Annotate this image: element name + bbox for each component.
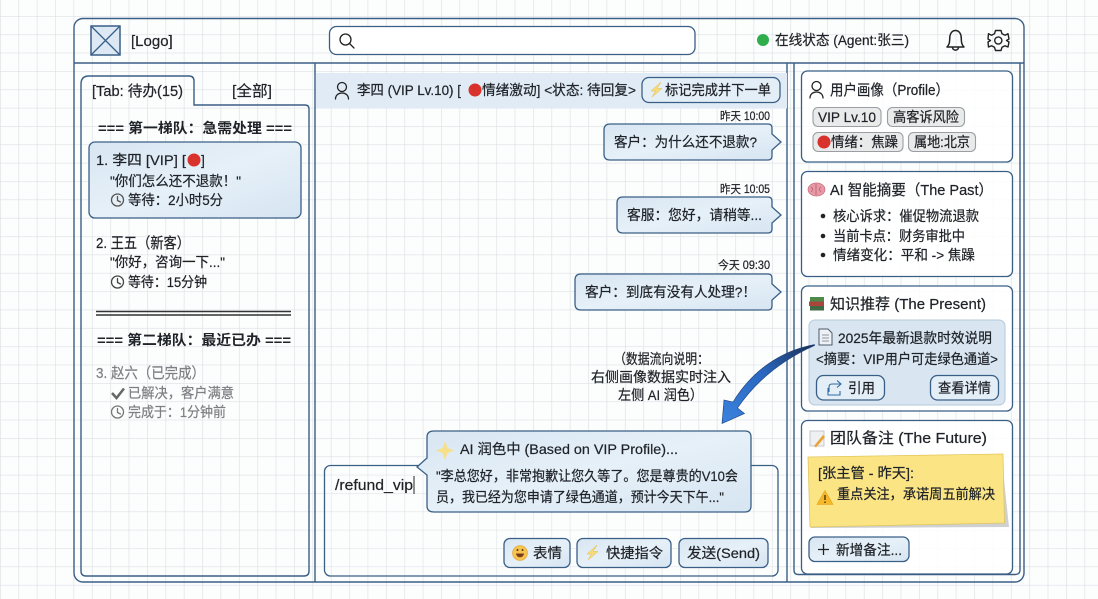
icon: bell [947,30,964,50]
tag: complaint risk: 高客诉风险 [893,109,959,125]
icon: gear [988,30,1009,50]
tag: mood: 情绪：焦躁 [831,134,898,150]
panel: chat column [316,73,787,576]
button: quick commands: 快捷指令 [606,545,663,561]
card: knowledge recommendation: 知识推荐 (The Present) [830,296,986,313]
button: view details [930,376,998,400]
button: mark complete [642,78,780,102]
button: mark complete: 标记完成并下一单 [665,82,771,98]
tab panel outline [81,76,309,576]
data flow note: 右侧画像数据实时注入 [591,369,731,385]
chat header: 情绪激动] <状态: 待回复> [482,82,636,98]
heading: tier two: === 第二梯队：最近已办 === [97,332,291,348]
card: team notes [802,420,1012,574]
button: send [679,538,768,568]
message 2: 昨天 10:05 [720,183,770,196]
summary list: 核心诉求：催促物流退款 [833,208,979,224]
data flow note [591,351,731,403]
list item: Zhao Liu [96,365,234,420]
message 3: 今天 09:30 [718,258,770,272]
list item: Li Si: 等待：2小时5分 [128,192,223,208]
message 1: 客户：为什么还不退款? [614,134,757,150]
input box: /refund_vip [335,477,413,494]
data flow note: （数据流向说明： [614,351,709,367]
message 2 [617,183,781,233]
list item: Li Si: ] [201,152,205,168]
recommended document: 2025年最新退款时效说明 [838,330,992,346]
card: team notes: 团队备注 (The Future) [830,430,987,447]
icon: logo placeholder [91,26,120,55]
search box [330,26,695,54]
button: quick commands [577,538,671,568]
AI polish bubble: "李总您好，非常抱歉让您久等了。您是尊贵的V10会 [436,468,738,484]
tag: VIP: VIP Lv.10 [818,109,876,125]
message 3 [575,258,781,310]
tab: all: [全部] [232,82,272,100]
button: view details: 查看详情 [938,380,991,396]
tab: pending: [Tab: 待办(15) [92,83,183,100]
heading: tier one: === 第一梯队：急需处理 === [98,120,292,136]
list item: Wang Wu: 等待：15分钟 [128,274,207,290]
sticky note: 重点关注，承诺周五前解决 [837,486,995,502]
list item: Li Si: 1. 李四 [VIP] [ [96,152,186,168]
input box [324,466,778,576]
icon: document [819,329,832,345]
button: quote: 引用 [848,380,875,396]
icon: brain [808,183,825,196]
button: send: 发送(Send) [687,545,760,561]
card: user profile [802,71,1012,162]
icon: memo [810,431,825,448]
recommended document [809,320,1005,405]
chat header [316,73,787,108]
button: quote [816,376,884,400]
panel: right sidebar frame [794,63,1020,574]
tag: location: 属地:北京 [914,134,970,150]
summary list: 当前卡点：财务审批中 [833,228,965,244]
summary list: 情绪变化：平和 -> 焦躁 [833,247,975,263]
message 2: 客服：您好，请稍等... [627,207,762,223]
online status: 在线状态 (Agent:张三) [775,32,909,48]
top bar [91,26,1009,55]
button: emoji [504,538,570,568]
list item: Wang Wu: 2. 王五（新客） [96,235,190,252]
list item: Wang Wu [96,235,225,290]
card: AI summary [802,172,1012,276]
card: AI summary: AI 智能摘要（The Past） [830,181,993,199]
chat header: 李四 (VIP Lv.10) [ [357,82,461,98]
card: knowledge recommendation [802,286,1012,411]
summary list [821,208,979,263]
icon: user [336,82,348,99]
list item: Zhao Liu: 3. 赵六（已完成） [96,365,205,382]
button: add note [809,537,909,562]
button: add note: 新增备注... [836,542,902,558]
arrow: data flow from knowledge card to AI bubble [722,344,814,424]
sticky note: [张主管 - 昨天]: [818,465,914,481]
AI polish bubble [417,431,751,512]
icon: sparkles [436,441,454,460]
card: user profile: 用户画像（Profile） [830,82,949,99]
message 3: 客户：到底有没有人处理?！ [585,284,756,300]
list item: Li Si [89,142,301,218]
AI polish bubble: 员，我已经为您申请了绿色通道，预计今天下午..." [436,489,724,505]
button: emoji: 表情 [533,545,562,561]
icon: user [810,82,823,98]
panel: left conversation list [81,76,309,576]
icon: books [809,297,824,310]
recommended document: <摘要：VIP用户可走绿色通道> [816,351,998,367]
tag: mood [813,132,903,152]
AI polish bubble: AI 润色中 (Based on VIP Profile)... [460,441,678,457]
list item: Zhao Liu: 已解决，客户满意 [128,385,234,401]
list item: Li Si: "你们怎么还不退款！" [110,173,241,189]
logo text: [Logo] [131,33,173,50]
data flow note: 左侧 AI 润色） [618,387,703,403]
list item: Wang Wu: "你好，咨询一下..." [110,254,225,270]
sticky note [808,454,1009,528]
message 1 [604,110,781,160]
list item: Zhao Liu: 完成于：1分钟前 [128,404,226,420]
message 1: 昨天 10:00 [720,110,770,123]
